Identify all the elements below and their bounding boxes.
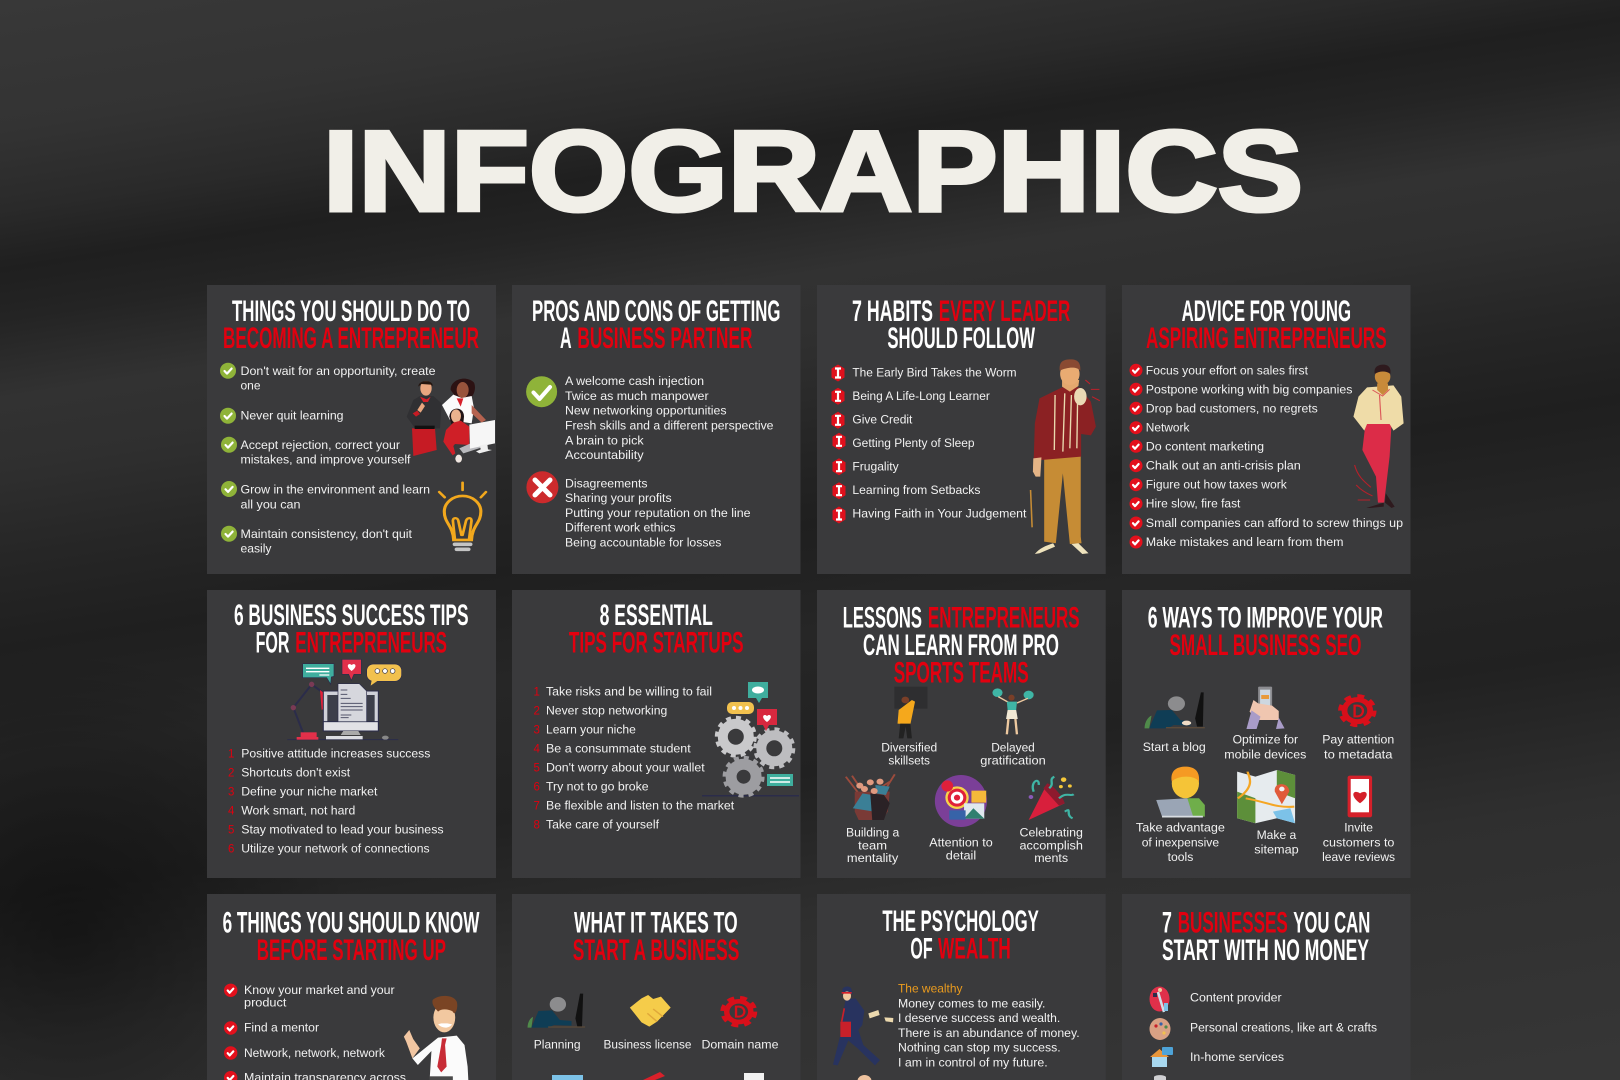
numbered list: 6	[534, 781, 540, 793]
numbered list: 5	[534, 762, 540, 774]
numbered list: 7	[534, 801, 540, 813]
pros list: New networking opportunities	[565, 404, 726, 418]
heading: BEFORE STARTING UP	[257, 934, 446, 967]
panel: 8 essential tips for startups	[512, 590, 800, 878]
illustration: three business people at a computer	[407, 379, 495, 463]
affirmations text: I am in control of my future.	[898, 1056, 1048, 1070]
list text: Frugality	[852, 460, 899, 474]
numbered list: 2	[534, 705, 540, 717]
cons list	[565, 476, 751, 550]
panel background	[817, 285, 1106, 574]
heading	[1148, 602, 1383, 662]
heading: ADVICE FOR YOUNG	[1182, 295, 1351, 328]
illustration: man in cream shirt and red trousers	[1353, 365, 1404, 508]
icons row two, cut by page edge	[552, 1072, 764, 1080]
numbered list: Take care of yourself	[546, 818, 660, 832]
list text: Make mistakes and learn from them	[1146, 535, 1344, 549]
list text: Learning from Setbacks	[852, 483, 980, 497]
heading	[1162, 907, 1370, 967]
panel background	[512, 285, 800, 574]
panel: 7 habits every leader should follow	[817, 285, 1106, 574]
labels row two: accomplish	[1020, 838, 1083, 852]
heading: BUSINESS PARTNER	[577, 322, 753, 355]
list text: Do content marketing	[1146, 440, 1264, 454]
heading	[852, 295, 1070, 355]
heading: CAN LEARN FROM PRO	[863, 629, 1059, 662]
cons list: Being accountable for losses	[565, 536, 721, 550]
icon: light bulb	[439, 483, 486, 549]
list text	[240, 364, 436, 556]
list text: Grow in the environment and learn	[240, 482, 430, 496]
panel: advice for young aspiring entrepreneurs	[1122, 285, 1410, 574]
panel: 6 things you should know before starting up	[207, 894, 496, 1080]
labels row two: Invite	[1344, 821, 1373, 835]
numbered list: Positive attitude increases success	[241, 747, 430, 761]
numbered list: Try not to go broke	[546, 779, 649, 793]
numbered list	[228, 747, 444, 856]
cons list: Disagreements	[565, 476, 648, 490]
heading: BUSINESSES	[1178, 907, 1288, 940]
labels row one: mobile devices	[1224, 747, 1306, 761]
panel background	[207, 894, 496, 1080]
heading	[569, 599, 744, 660]
heading: START WITH NO MONEY	[1162, 934, 1369, 967]
labels row two: Building a	[846, 826, 899, 840]
list text: Maintain consistency, don't quit	[240, 527, 413, 541]
heading	[882, 905, 1039, 965]
labels row one	[881, 741, 1046, 767]
icons row one	[528, 994, 755, 1028]
icons row two	[1156, 767, 1372, 823]
heading: YOU CAN	[1293, 907, 1370, 940]
labels row two: detail	[946, 848, 976, 862]
list text: Getting Plenty of Sleep	[852, 436, 975, 450]
list text: Don't wait for an opportunity, create	[240, 364, 436, 378]
list text: Hire slow, fire fast	[1146, 496, 1241, 510]
heading: THINGS YOU SHOULD DO TO	[232, 295, 470, 328]
panel: 6 business success tips for entrepreneurs	[207, 590, 496, 878]
panel: what it takes to start a business	[512, 894, 800, 1080]
labels row two: ments	[1034, 851, 1068, 865]
labels row one: Domain name	[702, 1037, 779, 1051]
list text: Accept rejection, correct your	[240, 438, 400, 452]
labels row one: to metadata	[1324, 747, 1393, 761]
icon: content provider	[1150, 986, 1170, 1012]
title: INFOGRAPHICS	[323, 108, 1303, 236]
pros list: A welcome cash injection	[565, 374, 704, 388]
numbered list: Never stop networking	[546, 703, 667, 717]
illustration: gears and speech bubbles	[702, 682, 799, 796]
panel background	[512, 894, 800, 1080]
heading: ENTREPRENEURS	[928, 602, 1080, 635]
list text: Postpone working with big companies	[1146, 382, 1352, 396]
numbered list: 1	[534, 686, 540, 698]
figure head cut by page edge	[858, 1075, 872, 1080]
panel background	[817, 590, 1106, 878]
labels row two: sitemap	[1254, 843, 1299, 857]
numbered list	[534, 684, 735, 832]
list text: Content provider	[1190, 991, 1282, 1005]
labels row two: tools	[1168, 850, 1193, 864]
numbered list: Work smart, not hard	[241, 804, 355, 818]
numbered list: 1	[228, 749, 234, 761]
panel: pros and cons of getting a business partner	[512, 285, 800, 574]
numbered list: Shortcuts don't exist	[241, 766, 351, 780]
heading: A	[560, 322, 572, 355]
list text: Drop bad customers, no regrets	[1146, 402, 1318, 416]
list text: The Early Bird Takes the Worm	[852, 366, 1017, 380]
numbered list: Don't worry about your wallet	[546, 760, 705, 774]
heading: 6 WAYS TO IMPROVE YOUR	[1148, 602, 1383, 635]
illustration: smiling businessman with thumb up	[404, 996, 468, 1080]
heading: 6 THINGS YOU SHOULD KNOW	[223, 907, 480, 940]
heading: START A BUSINESS	[573, 934, 739, 967]
heading: THE PSYCHOLOGY	[882, 905, 1039, 938]
labels row one	[534, 1037, 779, 1051]
list text: In-home services	[1190, 1050, 1284, 1064]
numbered list: Learn your niche	[546, 722, 636, 736]
heading: ASPIRING ENTREPRENEURS	[1146, 322, 1387, 355]
numbered list: Define your niche market	[241, 785, 378, 799]
numbered list: Stay motivated to lead your business	[241, 823, 444, 837]
list text: Having Faith in Your Judgement	[852, 507, 1027, 521]
labels row one: Pay attention	[1322, 733, 1394, 747]
list text: Know your market and your	[244, 983, 395, 997]
labels row two: Take advantage	[1136, 821, 1225, 835]
numbered list: Take risks and be willing to fail	[546, 684, 712, 698]
list text: Network	[1146, 420, 1190, 434]
cons list: Putting your reputation on the line	[565, 506, 751, 520]
pros list: Fresh skills and a different perspective	[565, 418, 774, 432]
numbered list: 8	[534, 820, 540, 832]
illustration: desk with computer, lamp and speech bubbles	[287, 659, 402, 740]
heading: SMALL BUSINESS SEO	[1170, 629, 1361, 662]
icons row one	[1145, 687, 1374, 729]
heading: SPORTS TEAMS	[894, 656, 1029, 689]
labels row two: mentality	[847, 851, 899, 865]
list text	[852, 366, 1027, 521]
numbered list: Utilize your network of connections	[241, 842, 430, 856]
panel background	[207, 590, 496, 878]
labels row one: Planning	[534, 1037, 581, 1051]
labels row two: team	[858, 838, 887, 852]
labels row two	[1136, 821, 1395, 864]
numbered list: 5	[228, 825, 234, 837]
heading	[234, 599, 468, 660]
list text: mistakes, and improve yourself	[240, 452, 411, 466]
list text: Chalk out an anti-crisis plan	[1146, 458, 1301, 472]
red check icons	[224, 984, 237, 1080]
list text: one	[240, 378, 261, 392]
heading	[573, 907, 739, 967]
panel background	[1122, 894, 1410, 1080]
numbered list: Be flexible and listen to the market	[546, 799, 735, 813]
icon: pros check	[526, 376, 557, 407]
panel background	[512, 590, 800, 878]
heading: FOR	[256, 627, 290, 660]
numbered list: 3	[534, 724, 540, 736]
heading: LESSONS	[843, 602, 922, 635]
panel: things you should do to become an entrepreneur	[207, 285, 496, 574]
list text: Focus your effort on sales first	[1146, 364, 1309, 378]
labels row two	[846, 826, 1083, 865]
labels row two: leave reviews	[1322, 850, 1395, 864]
heading: SHOULD FOLLOW	[887, 322, 1035, 355]
heading: EVERY LEADER	[939, 295, 1070, 328]
green check icons	[220, 363, 237, 542]
affirmations text: Money comes to me easily.	[898, 996, 1045, 1010]
numbered list: 4	[534, 743, 540, 755]
panel background	[1122, 590, 1410, 878]
list text	[1146, 364, 1403, 549]
icon: cons cross	[526, 471, 558, 503]
labels row two: of inexpensive	[1142, 835, 1219, 849]
labels row one: Diversified	[881, 741, 937, 755]
affirmations text: The wealthy	[898, 981, 963, 995]
icon: palette	[1150, 1018, 1170, 1040]
labels row two: Celebrating	[1020, 826, 1083, 840]
heading: 6 BUSINESS SUCCESS TIPS	[234, 599, 468, 632]
heading: BECOMING A ENTREPRENEUR	[223, 322, 479, 355]
affirmations text: I deserve success and wealth.	[898, 1011, 1060, 1025]
numbered list: 6	[228, 844, 234, 856]
labels row two: Make a	[1257, 828, 1296, 842]
red check icons	[1130, 364, 1142, 548]
list text: Being A Life-Long Learner	[852, 389, 990, 403]
heading: 7 HABITS	[852, 295, 933, 328]
list text: Never quit learning	[240, 408, 344, 422]
numbered list: Be a consummate student	[546, 741, 691, 755]
list text: Figure out how taxes work	[1146, 478, 1288, 492]
cons list: Sharing your profits	[565, 491, 672, 505]
heading: PROS AND CONS OF GETTING	[532, 295, 780, 328]
pros list: Twice as much manpower	[565, 389, 709, 403]
labels row one: Business license	[604, 1037, 692, 1051]
panel: the psychology of wealth	[817, 894, 1106, 1080]
list text: Find a mentor	[244, 1021, 319, 1035]
numbered list: 3	[228, 787, 234, 799]
pros list	[565, 374, 774, 462]
panel: 7 businesses you can start with no money	[1122, 894, 1410, 1080]
labels row two: Attention to	[929, 836, 993, 850]
list text: all you can	[240, 498, 301, 512]
panel background	[1122, 285, 1410, 574]
heading	[223, 907, 480, 967]
heading: TIPS FOR STARTUPS	[569, 627, 744, 660]
numbered list: 2	[228, 768, 234, 780]
heading: WEALTH	[938, 932, 1011, 965]
heading: ENTREPRENEURS	[295, 627, 447, 660]
list text: product	[244, 995, 287, 1009]
list text	[1190, 991, 1377, 1064]
pros list: A brain to pick	[565, 433, 644, 447]
heading	[843, 602, 1080, 689]
red badge icons	[832, 364, 846, 524]
heading: 8 ESSENTIAL	[600, 599, 713, 632]
labels row one: skillsets	[888, 753, 930, 767]
list text: Give Credit	[852, 413, 913, 427]
affirmations text: Nothing can stop my success.	[898, 1041, 1061, 1055]
labels row one	[1143, 733, 1394, 761]
labels row two: customers to	[1323, 835, 1394, 849]
cons list: Different work ethics	[565, 521, 676, 535]
heading: OF	[910, 932, 933, 965]
labels row one: Start a blog	[1143, 740, 1206, 754]
affirmations text: There is an abundance of money.	[898, 1026, 1080, 1040]
labels row one: Optimize for	[1233, 733, 1298, 747]
heading	[223, 295, 479, 355]
pros list: Accountability	[565, 448, 644, 462]
heading: WHAT IT TAKES TO	[574, 907, 738, 940]
labels row one: gratification	[980, 753, 1046, 767]
heading: 7	[1162, 907, 1172, 940]
icons row two	[846, 774, 1074, 827]
heading	[532, 295, 780, 355]
icons row one	[894, 687, 1034, 738]
list text: Small companies can afford to screw things up	[1146, 516, 1403, 530]
panel: 6 ways to improve your small business seo	[1122, 590, 1410, 878]
numbered list: 4	[228, 806, 235, 818]
icon: cut off at page edge	[1154, 1075, 1166, 1080]
list text: easily	[240, 542, 272, 556]
illustration: man in maroon sweater	[1031, 359, 1100, 554]
panel: lessons entrepreneurs can learn from pro sports teams	[817, 590, 1106, 878]
panel background	[207, 285, 496, 574]
labels row one: Delayed	[991, 741, 1035, 755]
affirmations text	[898, 981, 1080, 1070]
list text	[244, 983, 406, 1080]
heading	[1146, 295, 1387, 355]
list text: Personal creations, like art & crafts	[1190, 1020, 1377, 1034]
icon: house	[1150, 1047, 1173, 1067]
illustration: walking man with money	[833, 986, 893, 1065]
panel background	[817, 894, 1106, 1080]
list text: Network, network, network	[244, 1046, 386, 1060]
